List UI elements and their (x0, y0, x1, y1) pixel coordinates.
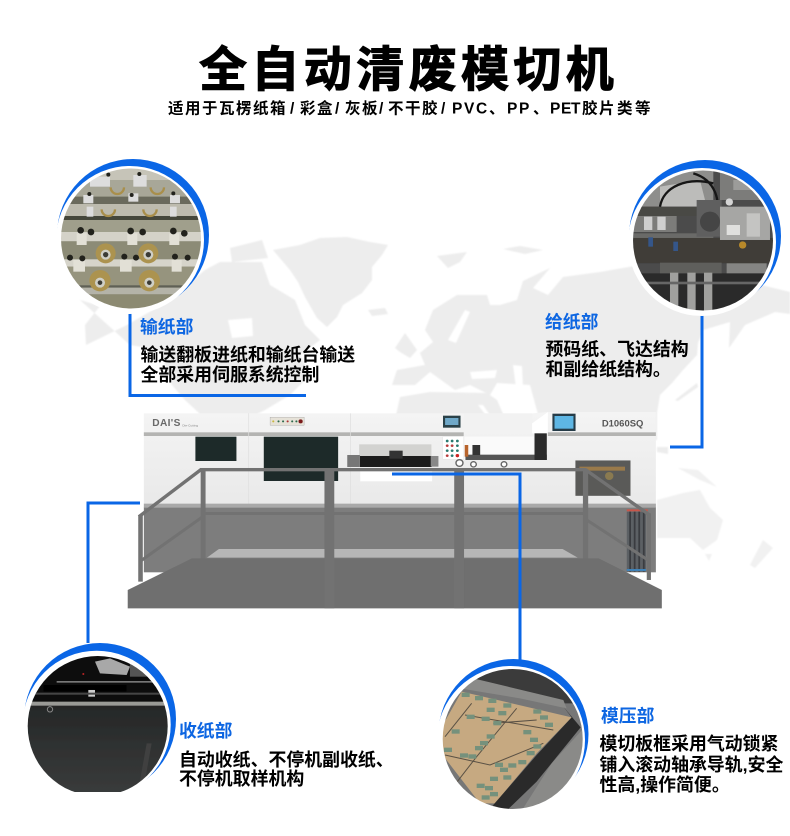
description (140, 344, 355, 385)
description: 预码纸、飞达结构 (546, 338, 689, 360)
feeder window (575, 460, 631, 496)
inlet pipes (627, 509, 648, 572)
circle photo: die board (437, 659, 588, 814)
panel: 输纸部 (56, 159, 355, 385)
subtitle: 适用于瓦楞纸箱/彩盒/灰板/不干胶/PVC、PP、PET胶片类等 (168, 98, 651, 118)
walkway grating (207, 549, 578, 558)
machine windows (195, 437, 338, 481)
control panel (443, 437, 464, 459)
brand text: DAI'S (152, 418, 181, 429)
description: 全部采用伺服系统控制 (140, 364, 319, 385)
platform deck (128, 558, 662, 608)
connector: feeder line to machine (670, 313, 702, 447)
heading: 给纸部 (545, 311, 599, 332)
touch screens (443, 414, 576, 431)
connector: delivery callout bracket (130, 311, 306, 396)
description: 铺入滚动轴承导轨,安全 (600, 754, 783, 775)
heading: 收纸部 (179, 720, 233, 741)
machine illustration (128, 412, 662, 608)
heading: 模压部 (601, 705, 655, 726)
description (179, 749, 394, 789)
model text: D1060SQ (602, 419, 643, 428)
circle photo: feeder (627, 160, 781, 316)
feeder mechanism (456, 433, 547, 467)
heading: 输纸部 (140, 316, 194, 337)
panel: 模压部 (437, 659, 783, 814)
connector: die-cut line to machine (392, 474, 520, 660)
description: 自动收纸、不停机副收纸、 (179, 749, 394, 770)
panel: 给纸部 (545, 160, 781, 380)
description: 输送翻板进纸和输纸台输送 (140, 344, 355, 365)
indicator strip (270, 417, 304, 425)
connector: output line to machine (88, 503, 140, 643)
machine illustration: Die-Cutting (182, 424, 198, 428)
die-cut opening (347, 444, 438, 481)
panel: 收纸部 (24, 643, 382, 792)
machine upper white body (144, 412, 656, 507)
machine lower grey body (144, 507, 656, 572)
description: 和副给纸结构。 (546, 358, 671, 380)
railing (138, 468, 651, 608)
circle photo: delivery (24, 643, 176, 792)
description: 模切板框采用气动锁紧 (600, 734, 779, 754)
description: 性高,操作简便。 (600, 774, 730, 795)
circle photo: conveyor (56, 159, 209, 314)
description (600, 734, 783, 795)
description: 不停机取样机构 (179, 768, 304, 789)
title: 全自动清废模切机 (199, 44, 618, 97)
description (546, 338, 689, 380)
world map background (80, 237, 790, 568)
